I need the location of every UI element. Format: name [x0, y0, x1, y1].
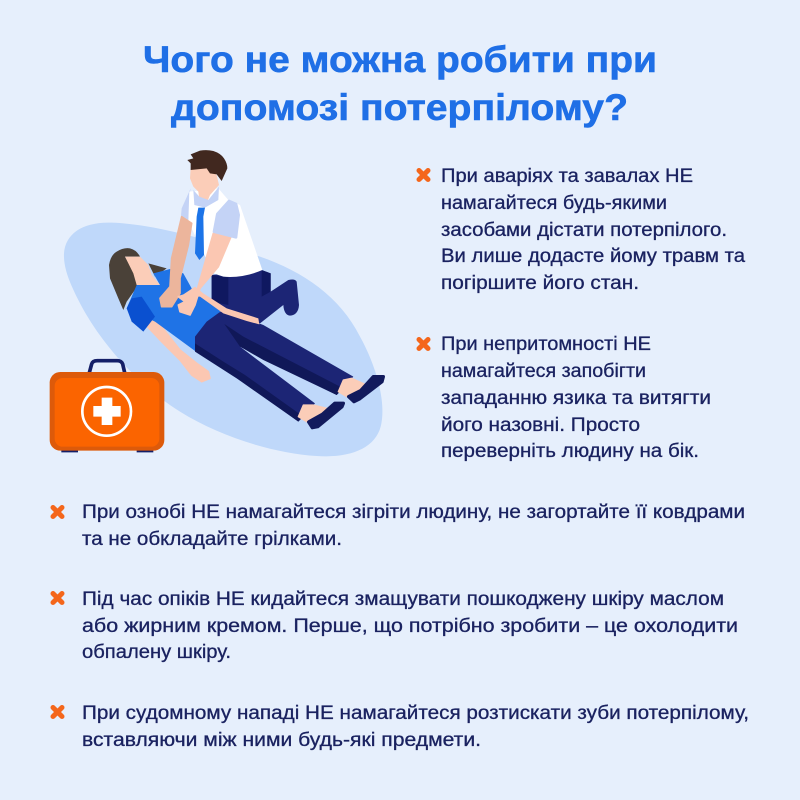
- patient sleeve: [127, 297, 155, 332]
- rescuer leg shadow: [212, 270, 271, 305]
- patient shirt: [127, 269, 222, 353]
- patient arm down: [146, 318, 210, 382]
- bullet: unconsciousness: переверніть людину на бік.: [441, 441, 699, 462]
- rescuer: [181, 150, 299, 323]
- bullet: burns: або жирним кремом. Перше, що потрібно зробити – це охолодити: [82, 616, 738, 637]
- rescuer sleeve left: [181, 188, 192, 223]
- title: допомозі потерпілому?: [171, 86, 628, 128]
- bullet: burns: обпалену шкіру.: [82, 642, 231, 663]
- bullet: chills: та не обкладайте грілками.: [82, 529, 342, 550]
- bullet: burns: [53, 589, 738, 663]
- kit handle: [89, 361, 125, 373]
- illustration: CPR first aid scene: [50, 150, 383, 456]
- patient arm across: [180, 287, 259, 324]
- first aid kit: [50, 361, 164, 452]
- rescuer face and neck: [190, 168, 219, 204]
- kit body: [50, 372, 164, 451]
- title: [143, 38, 657, 128]
- bullet: accidents: намагайтеся будь-якими: [441, 193, 667, 214]
- bullet: seizures: [53, 703, 749, 751]
- bullet: seizures: При судомному нападі НЕ намагайтеся розтискати зуби потерпілому,: [82, 703, 749, 724]
- kit feet: [61, 449, 153, 452]
- kit emblem: [82, 387, 131, 436]
- rescuer leg: [212, 270, 299, 323]
- rescuer shirt: [188, 188, 262, 277]
- title: Чого не можна робити при: [143, 38, 657, 80]
- patient trousers: [195, 310, 353, 422]
- bullet: accidents: [419, 166, 745, 294]
- bullet: accidents: Ви лише додасте йому травм та: [441, 246, 745, 267]
- far arm: [160, 217, 192, 307]
- bullet: unconsciousness: западанню язика та витягти: [441, 388, 711, 409]
- patient back hair: [148, 263, 167, 277]
- bullet: accidents: При аваріях та завалах НЕ: [441, 166, 693, 187]
- rescuer sleeve right: [214, 201, 239, 237]
- patient feet: [298, 378, 367, 422]
- bullet: unconsciousness: При непритомності НЕ: [441, 334, 651, 355]
- bullet: chills: [53, 502, 745, 550]
- patient face: [125, 257, 160, 285]
- bullet: unconsciousness: [419, 334, 711, 462]
- background blob: [64, 223, 382, 456]
- trousers shadow: [195, 324, 343, 422]
- bullet: chills: При ознобі НЕ намагайтеся зігріти людину, не загортайте її ковдрами: [82, 502, 745, 523]
- rescuer collar: [193, 187, 219, 208]
- rescuer hair: [187, 150, 227, 181]
- bullet: accidents: погіршите його стан.: [441, 273, 639, 294]
- patient: [109, 248, 383, 428]
- bullet: unconsciousness: його назовні. Просто: [441, 415, 640, 436]
- patient shoes: [309, 377, 383, 428]
- near arm: [178, 233, 232, 315]
- patient hair: [109, 248, 140, 310]
- rescuer tie: [195, 208, 205, 260]
- bullet: accidents: засобами дістати потерпілого.: [441, 220, 727, 241]
- bullet: unconsciousness: намагайтеся запобігти: [441, 361, 646, 382]
- bullet: burns: Під час опіків НЕ кидайтеся змащувати пошкоджену шкіру маслом: [82, 589, 724, 610]
- rescuer arms: [160, 201, 239, 315]
- bullet: seizures: вставляючи між ними будь-які предмети.: [82, 730, 481, 751]
